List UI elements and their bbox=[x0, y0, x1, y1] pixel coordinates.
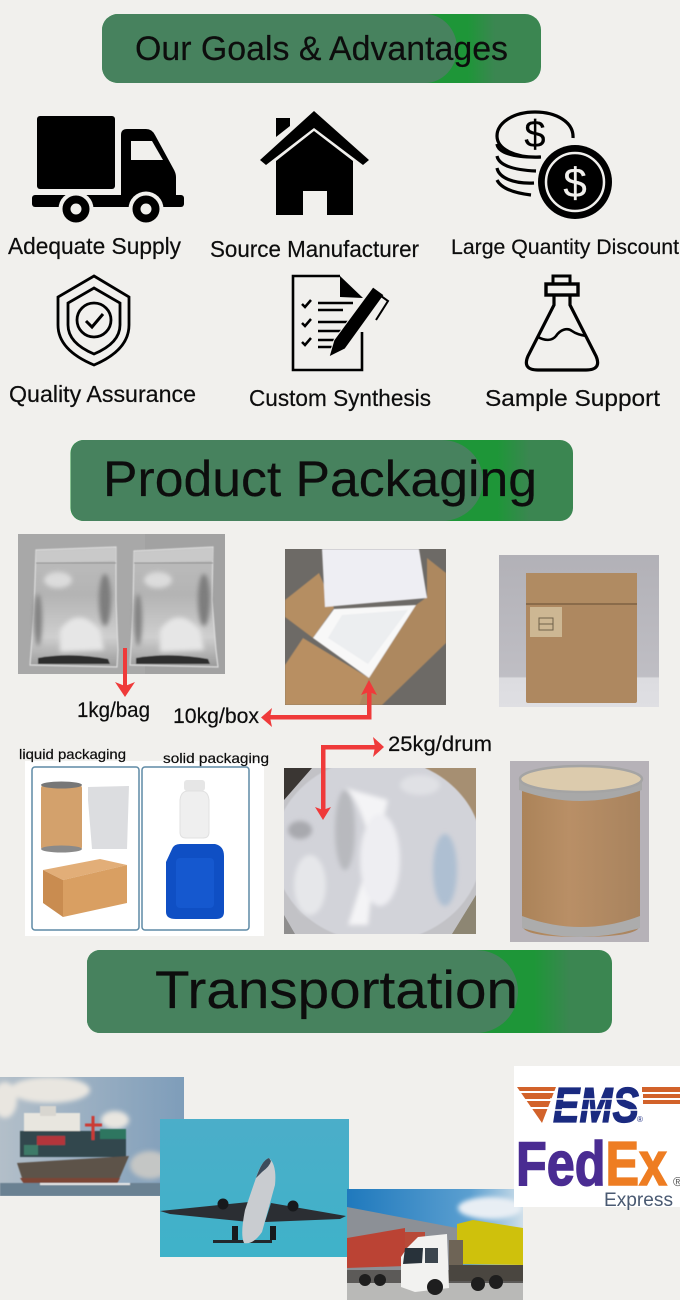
photo: foil bags bbox=[18, 534, 225, 674]
icon: coins: $ bbox=[524, 114, 546, 156]
logo: FedEx Express: Express bbox=[604, 1190, 673, 1211]
logo: EMS bbox=[517, 1079, 680, 1133]
label: Source Manufacturer: Source Manufacturer bbox=[210, 236, 419, 262]
photo: airplane bbox=[160, 1119, 349, 1257]
banner: Transportation: Transportation bbox=[155, 961, 518, 1020]
banner: Product Packaging bbox=[70, 440, 573, 521]
label: 1kg/bag: 1kg/bag bbox=[77, 699, 150, 722]
panel: solid packaging frame bbox=[142, 767, 249, 930]
label: Quality Assurance: Quality Assurance bbox=[9, 381, 196, 407]
icon: delivery truck bbox=[32, 116, 184, 226]
arrow: 25kg/drum bbox=[315, 737, 384, 820]
icon: document and pen bbox=[293, 276, 388, 370]
logo: EMS: ® bbox=[637, 1115, 643, 1124]
icon: coins: $ bbox=[563, 159, 587, 206]
icon: foil pouch bbox=[88, 786, 129, 849]
photo: carton box bbox=[499, 555, 659, 707]
label: Adequate Supply: Adequate Supply bbox=[8, 233, 181, 259]
icon: cardboard box bbox=[43, 859, 127, 917]
icon: white bottle bbox=[180, 780, 209, 838]
label: solid packaging: solid packaging bbox=[163, 750, 269, 766]
banner: Our Goals & Advantages: Our Goals & Advantages bbox=[135, 30, 508, 68]
label: Custom Synthesis: Custom Synthesis bbox=[249, 385, 431, 411]
arrow: 1kg/bag bbox=[115, 648, 135, 697]
photo: container ship bbox=[0, 1077, 184, 1196]
icon: flask bbox=[526, 276, 598, 370]
label: 10kg/box: 10kg/box bbox=[173, 705, 260, 728]
photo: fibre drum bbox=[510, 761, 649, 942]
logo: FedEx Express: FedEx bbox=[516, 1130, 667, 1199]
photo: plastic bag in drum bbox=[284, 768, 476, 934]
label: 25kg/drum: 25kg/drum bbox=[388, 733, 492, 756]
panel: liquid packaging frame bbox=[32, 767, 139, 930]
photo: foam box in carton bbox=[285, 549, 446, 705]
icon: house bbox=[260, 111, 369, 215]
panel: courier logos bbox=[514, 1066, 680, 1211]
logo: EMS: EMS bbox=[553, 1079, 639, 1133]
banner: Product Packaging: Product Packaging bbox=[103, 451, 537, 507]
label: Sample Support: Sample Support bbox=[485, 385, 661, 411]
icon: shield with check bbox=[58, 276, 129, 365]
icon: coins bbox=[497, 112, 612, 219]
arrow: 10kg/box bbox=[261, 680, 377, 727]
icon: blue jerrycan bbox=[166, 844, 224, 919]
photo: container truck bbox=[347, 1189, 523, 1300]
banner: Our Goals & Advantages bbox=[102, 14, 541, 83]
panel: liquid and solid packaging bbox=[25, 761, 264, 936]
icon: fibre drum bbox=[41, 782, 82, 852]
label: Large Quantity Discount: Large Quantity Discount bbox=[451, 236, 679, 259]
banner: Transportation bbox=[87, 950, 612, 1033]
label: liquid packaging: liquid packaging bbox=[19, 746, 126, 762]
